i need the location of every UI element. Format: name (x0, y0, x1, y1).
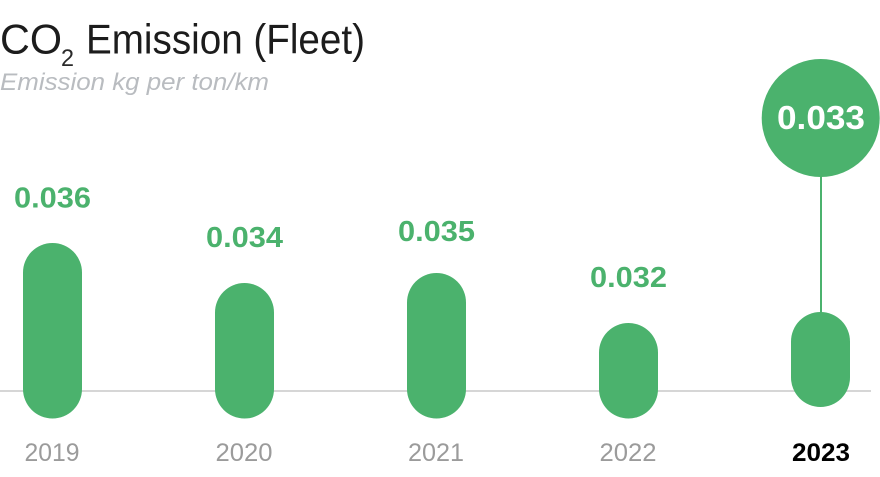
subtitle: Emission kg per ton/km (0, 69, 269, 96)
bar: 2022 (599, 323, 658, 418)
title: 2 (61, 45, 74, 72)
year label: 2023: 2023 (792, 439, 850, 467)
year label: 2022: 2022 (600, 439, 656, 467)
value: 2022: 0.032 (590, 262, 667, 294)
baseline (0, 390, 871, 392)
value: 2019: 0.036 (14, 182, 91, 214)
callout circle: 2023 (762, 59, 880, 177)
title (0, 16, 365, 72)
year label: 2020: 2020 (216, 439, 272, 467)
bar: 2021 (407, 273, 466, 418)
value: 2023: 0.033 (777, 99, 865, 136)
title: Emission (Fleet) (86, 16, 365, 62)
bar: 2020 (215, 283, 274, 418)
value: 2021: 0.035 (398, 216, 475, 248)
title: CO (0, 16, 62, 62)
year label: 2019: 2019 (24, 439, 80, 467)
bar: 2023 (791, 312, 850, 407)
year label: 2021: 2021 (408, 439, 464, 467)
bar: 2019 (23, 243, 82, 418)
connector line: 2023 (820, 170, 822, 320)
value: 2020: 0.034 (206, 222, 283, 254)
